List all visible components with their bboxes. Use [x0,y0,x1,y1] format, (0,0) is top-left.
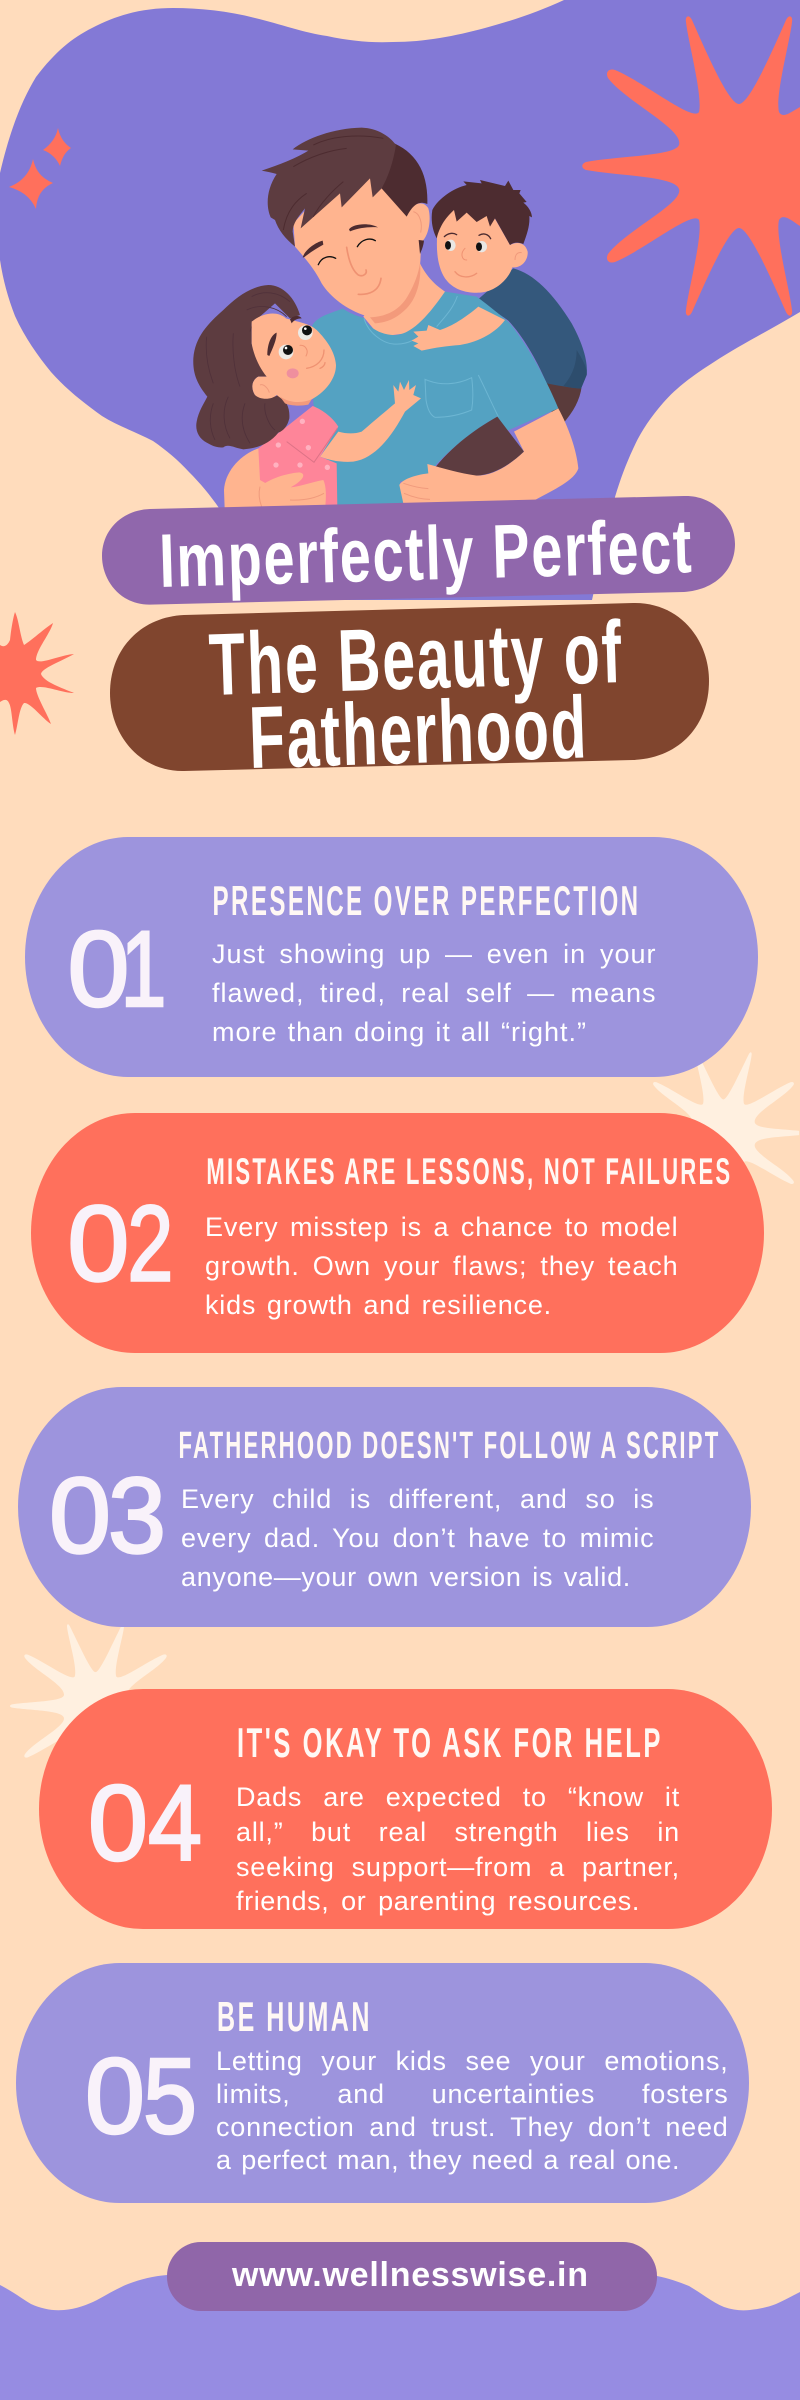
card 02 body text: kids growth and resilience. [205,1290,552,1320]
card 04 number and heading: 0 [88,1762,148,1883]
boy's shirt [477,268,587,389]
card 03 body text: Every child is different, and so is [181,1484,655,1514]
card 02 number and heading: 0 [67,1182,129,1304]
card 03 body text: anyone—your own version is valid. [181,1562,631,1592]
card 05 number and heading: BE HUMAN [217,1993,372,2040]
card 01 body text [212,938,656,1046]
girl's face [252,314,336,406]
girl's shoulder and back [224,448,280,508]
card 03: fatherhood doesn't follow a script [18,1387,751,1626]
icon: coral starburst top right [582,16,800,316]
card 05 body text: Letting your kids see your emotions, [216,2046,729,2076]
card 03 body text [181,1484,655,1592]
card 04 body text: seeking support—from a partner, [236,1852,680,1882]
card 01 body text: more than doing it all “right.” [212,1016,587,1046]
card 04 body text: all,” but real strength lies in [236,1817,680,1847]
father's head [293,177,430,323]
father's hair [262,128,427,247]
card 02 number and heading [67,1151,732,1304]
card 04 number and heading [88,1719,663,1883]
shirt seams and pocket [364,296,498,417]
card 01: presence over perfection [24,837,758,1076]
father's hand on girl [259,472,326,507]
icon: small coral starburst left [0,612,74,735]
card 03 number and heading: 0 [49,1454,111,1576]
card 05: be human [16,1963,749,2202]
card 05 body text: limits, and uncertainties fosters [216,2078,729,2108]
father's shirt [312,292,558,507]
boy's leg [428,417,524,477]
card 05 number and heading: 5 [143,2035,197,2156]
website address: www.wellnesswise.in [231,2256,588,2294]
card 05 number and heading [85,1993,372,2156]
card 01 number and heading: 0 [67,908,129,1029]
card 01 body text: Just showing up — even in your [212,938,656,968]
card 04 number and heading: 4 [148,1762,202,1883]
card 03 number and heading: 3 [108,1454,166,1576]
card 05 body text: a perfect man, they need a real one. [216,2144,680,2174]
card 02 body text: Every misstep is a chance to model [205,1212,679,1242]
illustration: father with two children [193,128,587,508]
girl's arm and hand [320,380,421,462]
card 05 body text [216,2046,729,2174]
title line 3: Fatherhood [247,677,589,787]
banner: Imperfectly Perfect [102,496,735,605]
banner: The Beauty of Fatherhood [110,602,709,787]
girl's hair [193,285,300,449]
card 01 number and heading: 1 [120,908,166,1029]
icon: cream starburst left [10,1624,181,1788]
card 04 body text: friends, or parenting resources. [236,1886,640,1916]
father's neck [363,263,447,337]
boy's head [432,180,532,293]
card 05 number and heading: 0 [85,2035,145,2156]
card 05 body text: connection and trust. They don’t need [216,2112,729,2142]
card 02 body text [205,1212,679,1320]
icon: coral sparkles [9,128,71,209]
card 04: it's okay to ask for help [39,1689,772,1928]
father's arm and hand [399,408,578,503]
card 04 body text: Dads are expected to “know it [236,1782,680,1812]
card 01 number and heading [67,877,640,1029]
boy's shorts [543,382,582,423]
father's face details [303,224,381,294]
card 03 number and heading [49,1425,720,1576]
girl's dress [258,406,338,507]
boy's arm [412,307,505,351]
card 03 body text: every dad. You don’t have to mimic [181,1522,655,1552]
footer website pill [167,2242,657,2311]
card 02 number and heading: 2 [127,1182,173,1304]
card 02: mistakes are lessons [31,1113,764,1352]
card 01 body text: flawed, tired, real self — means [212,978,656,1008]
card 02 body text: growth. Own your flaws; they teach [205,1250,679,1280]
icon: cream starburst right [653,1052,799,1214]
card 04 body text [236,1782,680,1916]
footer wave [0,2270,800,2400]
purple blob [0,0,800,600]
